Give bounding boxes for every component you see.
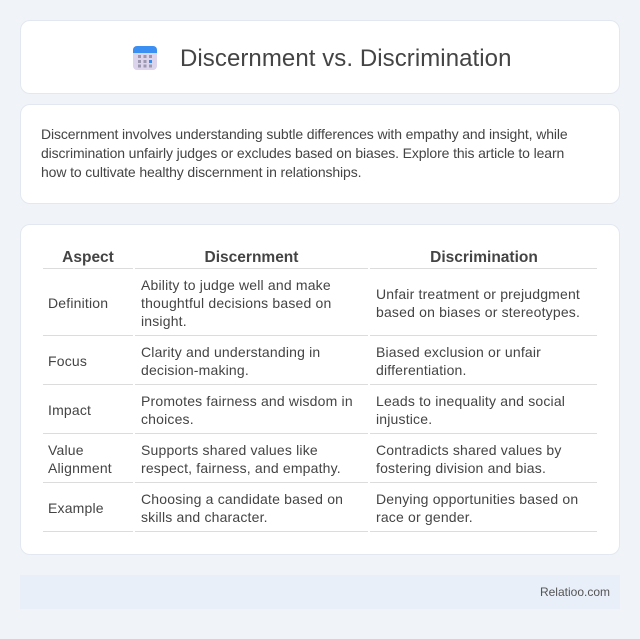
panel: comparison table xyxy=(20,224,620,555)
row: example: Denying opportunities based on xyxy=(376,491,578,507)
row: value alignment: Supports shared values like xyxy=(141,442,318,458)
row: definition: Definition xyxy=(48,295,108,311)
row: definition: insight. xyxy=(141,313,187,329)
panel: title card xyxy=(20,20,620,94)
row: definition: Unfair treatment or prejudgment xyxy=(376,286,580,302)
footer bar xyxy=(20,575,620,609)
row: example: race or gender. xyxy=(376,509,473,525)
icon: calendar xyxy=(133,46,157,70)
table header: Discrimination xyxy=(430,249,538,266)
text block: intro: how to cultivate healthy discernment in relationships. xyxy=(41,164,361,180)
row: focus: decision-making. xyxy=(141,362,249,378)
row: focus xyxy=(48,344,541,378)
row: definition xyxy=(48,277,580,329)
title: Discernment vs. Discrimination xyxy=(180,45,512,72)
row: definition: Ability to judge well and make xyxy=(141,277,331,293)
row: example: skills and character. xyxy=(141,509,268,525)
row: value alignment: Alignment xyxy=(48,460,112,476)
row: focus: Biased exclusion or unfair xyxy=(376,344,541,360)
row: value alignment xyxy=(48,442,562,476)
row: focus: Clarity and understanding in xyxy=(141,344,320,360)
row: focus: Focus xyxy=(48,353,87,369)
table header: Discernment xyxy=(205,249,298,266)
text block: intro: Discernment involves understanding subtle differences with empathy and insight, while xyxy=(41,126,568,142)
row: impact: Impact xyxy=(48,402,91,418)
row: value alignment: Contradicts shared values by xyxy=(376,442,562,458)
footer credit: Relatioo.com xyxy=(540,585,610,599)
row: value alignment: respect, fairness, and empathy. xyxy=(141,460,341,476)
row: impact: choices. xyxy=(141,411,194,427)
text block: intro xyxy=(41,126,568,180)
row: value alignment: fostering division and bias. xyxy=(376,460,546,476)
row: impact: Promotes fairness and wisdom in xyxy=(141,393,353,409)
row: definition: thoughtful decisions based on xyxy=(141,295,331,311)
table header xyxy=(62,249,538,266)
text block: intro: discrimination unfairly judges or excludes based on biases. Explore this article to learn xyxy=(41,145,564,161)
row: impact: Leads to inequality and social xyxy=(376,393,565,409)
row: focus: differentiation. xyxy=(376,362,467,378)
panel: intro text xyxy=(20,104,620,204)
table header: Aspect xyxy=(62,249,114,266)
row: definition: based on biases or stereotypes. xyxy=(376,304,580,320)
row: value alignment: Value xyxy=(48,442,84,458)
row: impact xyxy=(48,393,565,427)
row: example: Example xyxy=(48,500,104,516)
row: example: Choosing a candidate based on xyxy=(141,491,343,507)
row: example xyxy=(48,491,578,525)
row: impact: injustice. xyxy=(376,411,432,427)
